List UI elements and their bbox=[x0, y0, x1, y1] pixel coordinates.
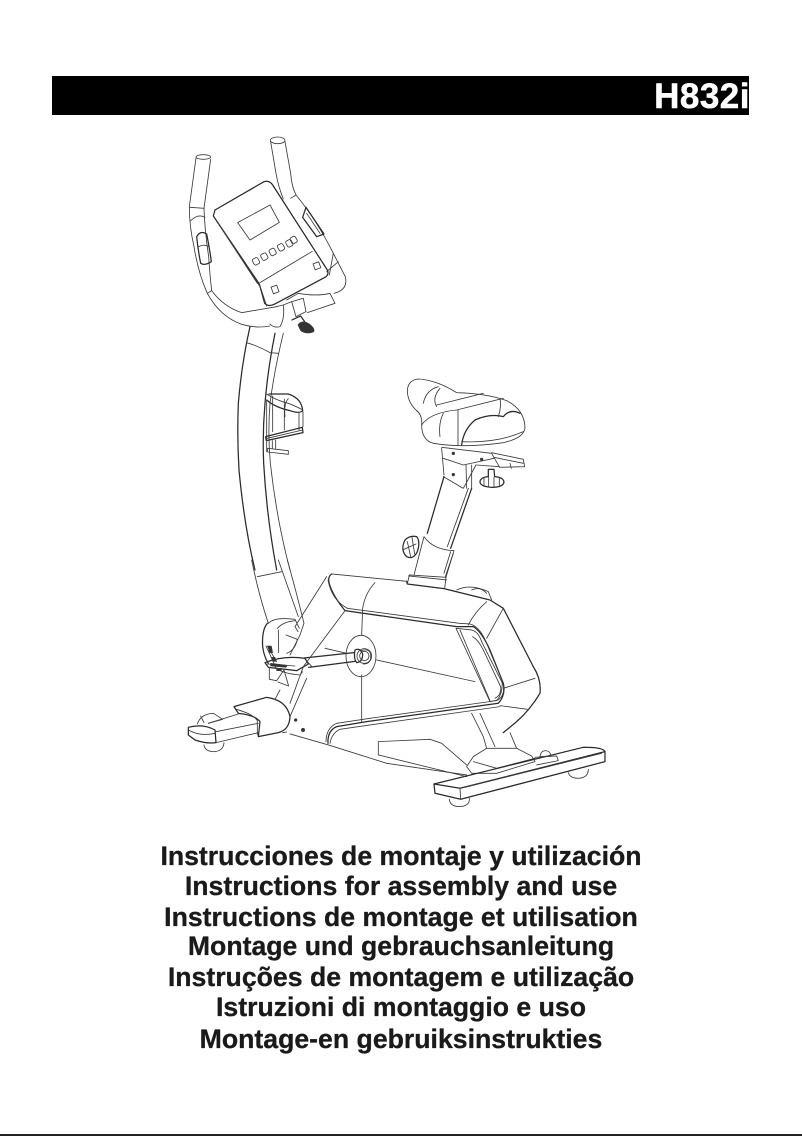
console screen bbox=[238, 205, 279, 240]
bottle holder bbox=[266, 394, 303, 454]
upright post bbox=[238, 327, 290, 570]
rear bracket bbox=[378, 739, 467, 777]
main frame body bbox=[290, 574, 540, 777]
rear stabilizer foot bbox=[434, 747, 605, 807]
handlebar bbox=[189, 137, 346, 327]
Italian line: Istruzioni di montaggio e uso bbox=[216, 992, 586, 1022]
console buttons bbox=[252, 236, 298, 266]
frame bolts bbox=[294, 719, 305, 732]
handlebar clamp and knob bbox=[270, 298, 314, 333]
model name: H832i bbox=[654, 77, 750, 116]
German line: Montage und gebrauchsanleitung bbox=[188, 930, 614, 960]
console bbox=[213, 181, 328, 306]
left pedal and strap bbox=[265, 646, 308, 686]
seat post and clamp knob bbox=[403, 447, 525, 589]
multilingual assembly instructions text bbox=[160, 840, 642, 1054]
saddle bbox=[407, 379, 525, 446]
French line: Instructions de montage et utilisation bbox=[164, 902, 638, 932]
English line: Instructions for assembly and use bbox=[185, 870, 617, 900]
front stabilizer foot bbox=[188, 635, 307, 752]
Dutch line: Montage-en gebruiksinstrukties bbox=[200, 1024, 602, 1054]
crank arm and hub bbox=[304, 635, 376, 677]
lower post section bbox=[252, 560, 304, 663]
chain cover window bbox=[456, 628, 504, 702]
Spanish line: Instrucciones de montaje y utilización bbox=[160, 840, 642, 870]
Portuguese line: Instruções de montagem e utilização bbox=[168, 962, 634, 992]
title bar with model name bbox=[52, 76, 749, 115]
